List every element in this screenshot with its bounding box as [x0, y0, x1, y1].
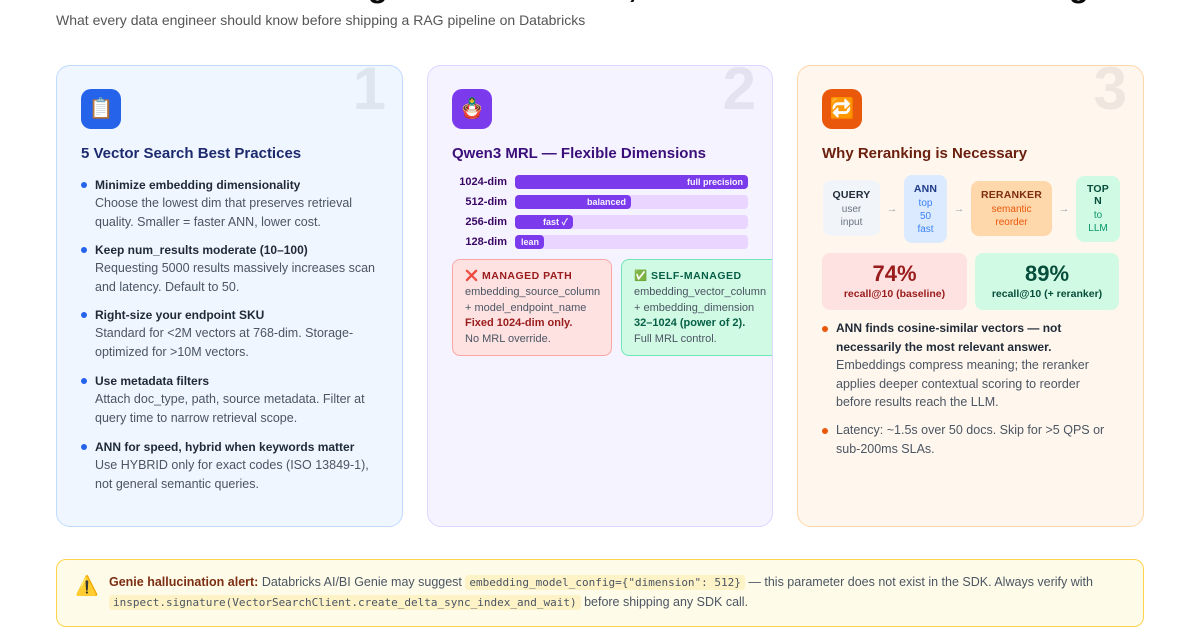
bullet 2: and latency. Default to 50. — [95, 280, 239, 294]
stat: reranker recall: recall@10 (+ reranker) — [992, 288, 1102, 300]
step: reranker — [971, 181, 1052, 236]
icon: clipboard: 📋 — [89, 98, 113, 120]
bar chart: dimensions: lean — [521, 237, 539, 247]
bullet 1: Minimize embedding dimensionality — [95, 178, 300, 192]
callout: managed path — [452, 259, 612, 356]
bullet 4 — [81, 374, 365, 425]
bullet 3 — [81, 308, 353, 359]
step: ANN: 50 — [920, 210, 931, 222]
arrow: → — [1058, 203, 1070, 215]
bar chart: dimensions: fast ✓ — [543, 217, 568, 227]
step: query — [823, 180, 880, 236]
alert text: Genie hallucination alert: Databricks AI/BI Genie may suggest embedding_model_config={"dimension": 512} — this parameter does not exist in the SDK. Always verify with — [109, 575, 1093, 589]
step: query: input — [841, 216, 862, 228]
step: reranker: reorder — [995, 216, 1028, 228]
bullet 3: Right-size your endpoint SKU — [95, 308, 264, 322]
bullet 5: ANN for speed, hybrid when keywords matter — [95, 440, 354, 454]
stat: reranker recall: 89% — [1025, 261, 1069, 286]
bullet 5 — [81, 440, 369, 491]
heading: reranking: Why Reranking is Necessary — [822, 145, 1027, 162]
alert text — [109, 575, 1093, 610]
bullet 2: Requesting 5000 results massively increases scan — [95, 261, 375, 275]
bar chart: dimensions: 1024-dim — [459, 176, 507, 188]
icon: warning: ⚠️ — [75, 576, 99, 597]
latency bullet: sub-200ms SLAs. — [836, 442, 935, 456]
explanation bullet: necessarily the most relevant answer. — [836, 340, 1051, 354]
bar chart: dimensions: balanced — [587, 197, 626, 207]
arrow: → — [954, 203, 964, 215]
panel: reranking — [797, 65, 1144, 527]
bullet 1: Choose the lowest dim that preserves retrieval — [95, 196, 352, 210]
callout: self-managed — [621, 259, 781, 356]
callout: managed path: No MRL override. — [465, 333, 551, 345]
flow diagram — [823, 175, 1120, 243]
heading: Qwen3 MRL: Qwen3 MRL — Flexible Dimensions — [452, 145, 706, 162]
explanation bullet: before results reach the LLM. — [836, 395, 999, 409]
bullet 4: Use metadata filters — [95, 374, 209, 388]
step: ANN: top — [919, 198, 932, 208]
step: ANN: fast — [917, 224, 934, 234]
callout: managed path: + model_endpoint_name — [465, 302, 586, 314]
panel: best practices — [56, 65, 403, 527]
icon: nesting dolls — [452, 89, 492, 129]
bullet 5: not general semantic queries. — [95, 477, 259, 491]
bullet 2 — [81, 242, 375, 294]
step: reranker: semantic — [991, 204, 1032, 214]
stat: reranker recall — [975, 253, 1119, 310]
heading: best practices: 5 Vector Search Best Practices — [81, 145, 301, 162]
bullet 4: query time to narrow retrieval scope. — [95, 411, 297, 425]
latency bullet: Latency: ~1.5s over 50 docs. Skip for >5 QPS or — [836, 423, 1104, 437]
step: query: user — [842, 204, 861, 214]
callout: self-managed: + embedding_dimension — [634, 302, 754, 314]
step: ANN — [904, 175, 947, 243]
icon: nesting dolls: 🪆 — [460, 98, 484, 120]
bullet 2: Keep num_results moderate (10–100) — [95, 242, 308, 256]
step: query: QUERY — [833, 188, 870, 200]
bullet 5: Use HYBRID only for exact codes (ISO 13849-1), — [95, 458, 369, 472]
latency bullet — [822, 423, 1104, 456]
icon: repeat arrows: 🔁 — [830, 98, 854, 120]
stat: baseline recall: 74% — [872, 261, 917, 286]
explanation bullet: ANN finds cosine-similar vectors — not — [836, 321, 1061, 335]
callout: Genie hallucination alert — [56, 559, 1144, 627]
step: reranker: RERANKER — [981, 188, 1042, 200]
callout: managed path: Fixed 1024-dim only. — [465, 317, 572, 329]
callout: self-managed: 32–1024 (power of 2). — [634, 317, 745, 329]
stat: baseline recall: recall@10 (baseline) — [844, 288, 945, 300]
bar chart: dimensions — [459, 175, 748, 249]
callout: managed path: ❌ MANAGED PATH — [465, 270, 572, 282]
step: top N: to — [1094, 210, 1102, 221]
bullet 1 — [81, 178, 352, 229]
bullet 4: Attach doc_type, path, source metadata. Filter at — [95, 392, 365, 406]
step: ANN: ANN — [914, 182, 937, 194]
stat: baseline recall — [822, 253, 967, 310]
step: top N — [1076, 176, 1120, 242]
explanation bullet — [822, 321, 1089, 409]
step: top N: N — [1094, 195, 1102, 207]
step: top N: LLM — [1088, 223, 1108, 234]
bullet 3: Standard for <2M vectors at 768-dim. Storage- — [95, 326, 353, 340]
bar chart: dimensions: 256-dim — [465, 216, 507, 228]
bullet 1: quality. Smaller = faster ANN, lower cost. — [95, 215, 321, 229]
callout: managed path: embedding_source_column — [465, 286, 600, 298]
bullet 3: optimized for >10M vectors. — [95, 345, 249, 359]
bar chart: dimensions: 128-dim — [465, 236, 507, 248]
explanation bullet: applies deeper contextual scoring to reorder — [836, 377, 1080, 391]
callout: self-managed: Full MRL control. — [634, 333, 717, 345]
icon: repeat arrows — [822, 89, 862, 129]
callout: self-managed: ✅ SELF-MANAGED — [634, 270, 742, 282]
subtitle: What every data engineer should know before shipping a RAG pipeline on Databricks — [56, 12, 585, 28]
step: top N: TOP — [1087, 183, 1109, 195]
callout: self-managed: embedding_vector_column — [634, 286, 766, 298]
icon: clipboard — [81, 89, 121, 129]
explanation bullet: Embeddings compress meaning; the reranker — [836, 358, 1089, 372]
arrow: → — [886, 203, 898, 215]
bar chart: dimensions: 512-dim — [465, 196, 507, 208]
panel: Qwen3 MRL — [427, 65, 773, 527]
bar chart: dimensions: full precision — [687, 177, 743, 187]
alert text: inspect.signature(VectorSearchClient.create_delta_sync_index_and_wait) before shipping any SDK call. — [113, 595, 748, 609]
